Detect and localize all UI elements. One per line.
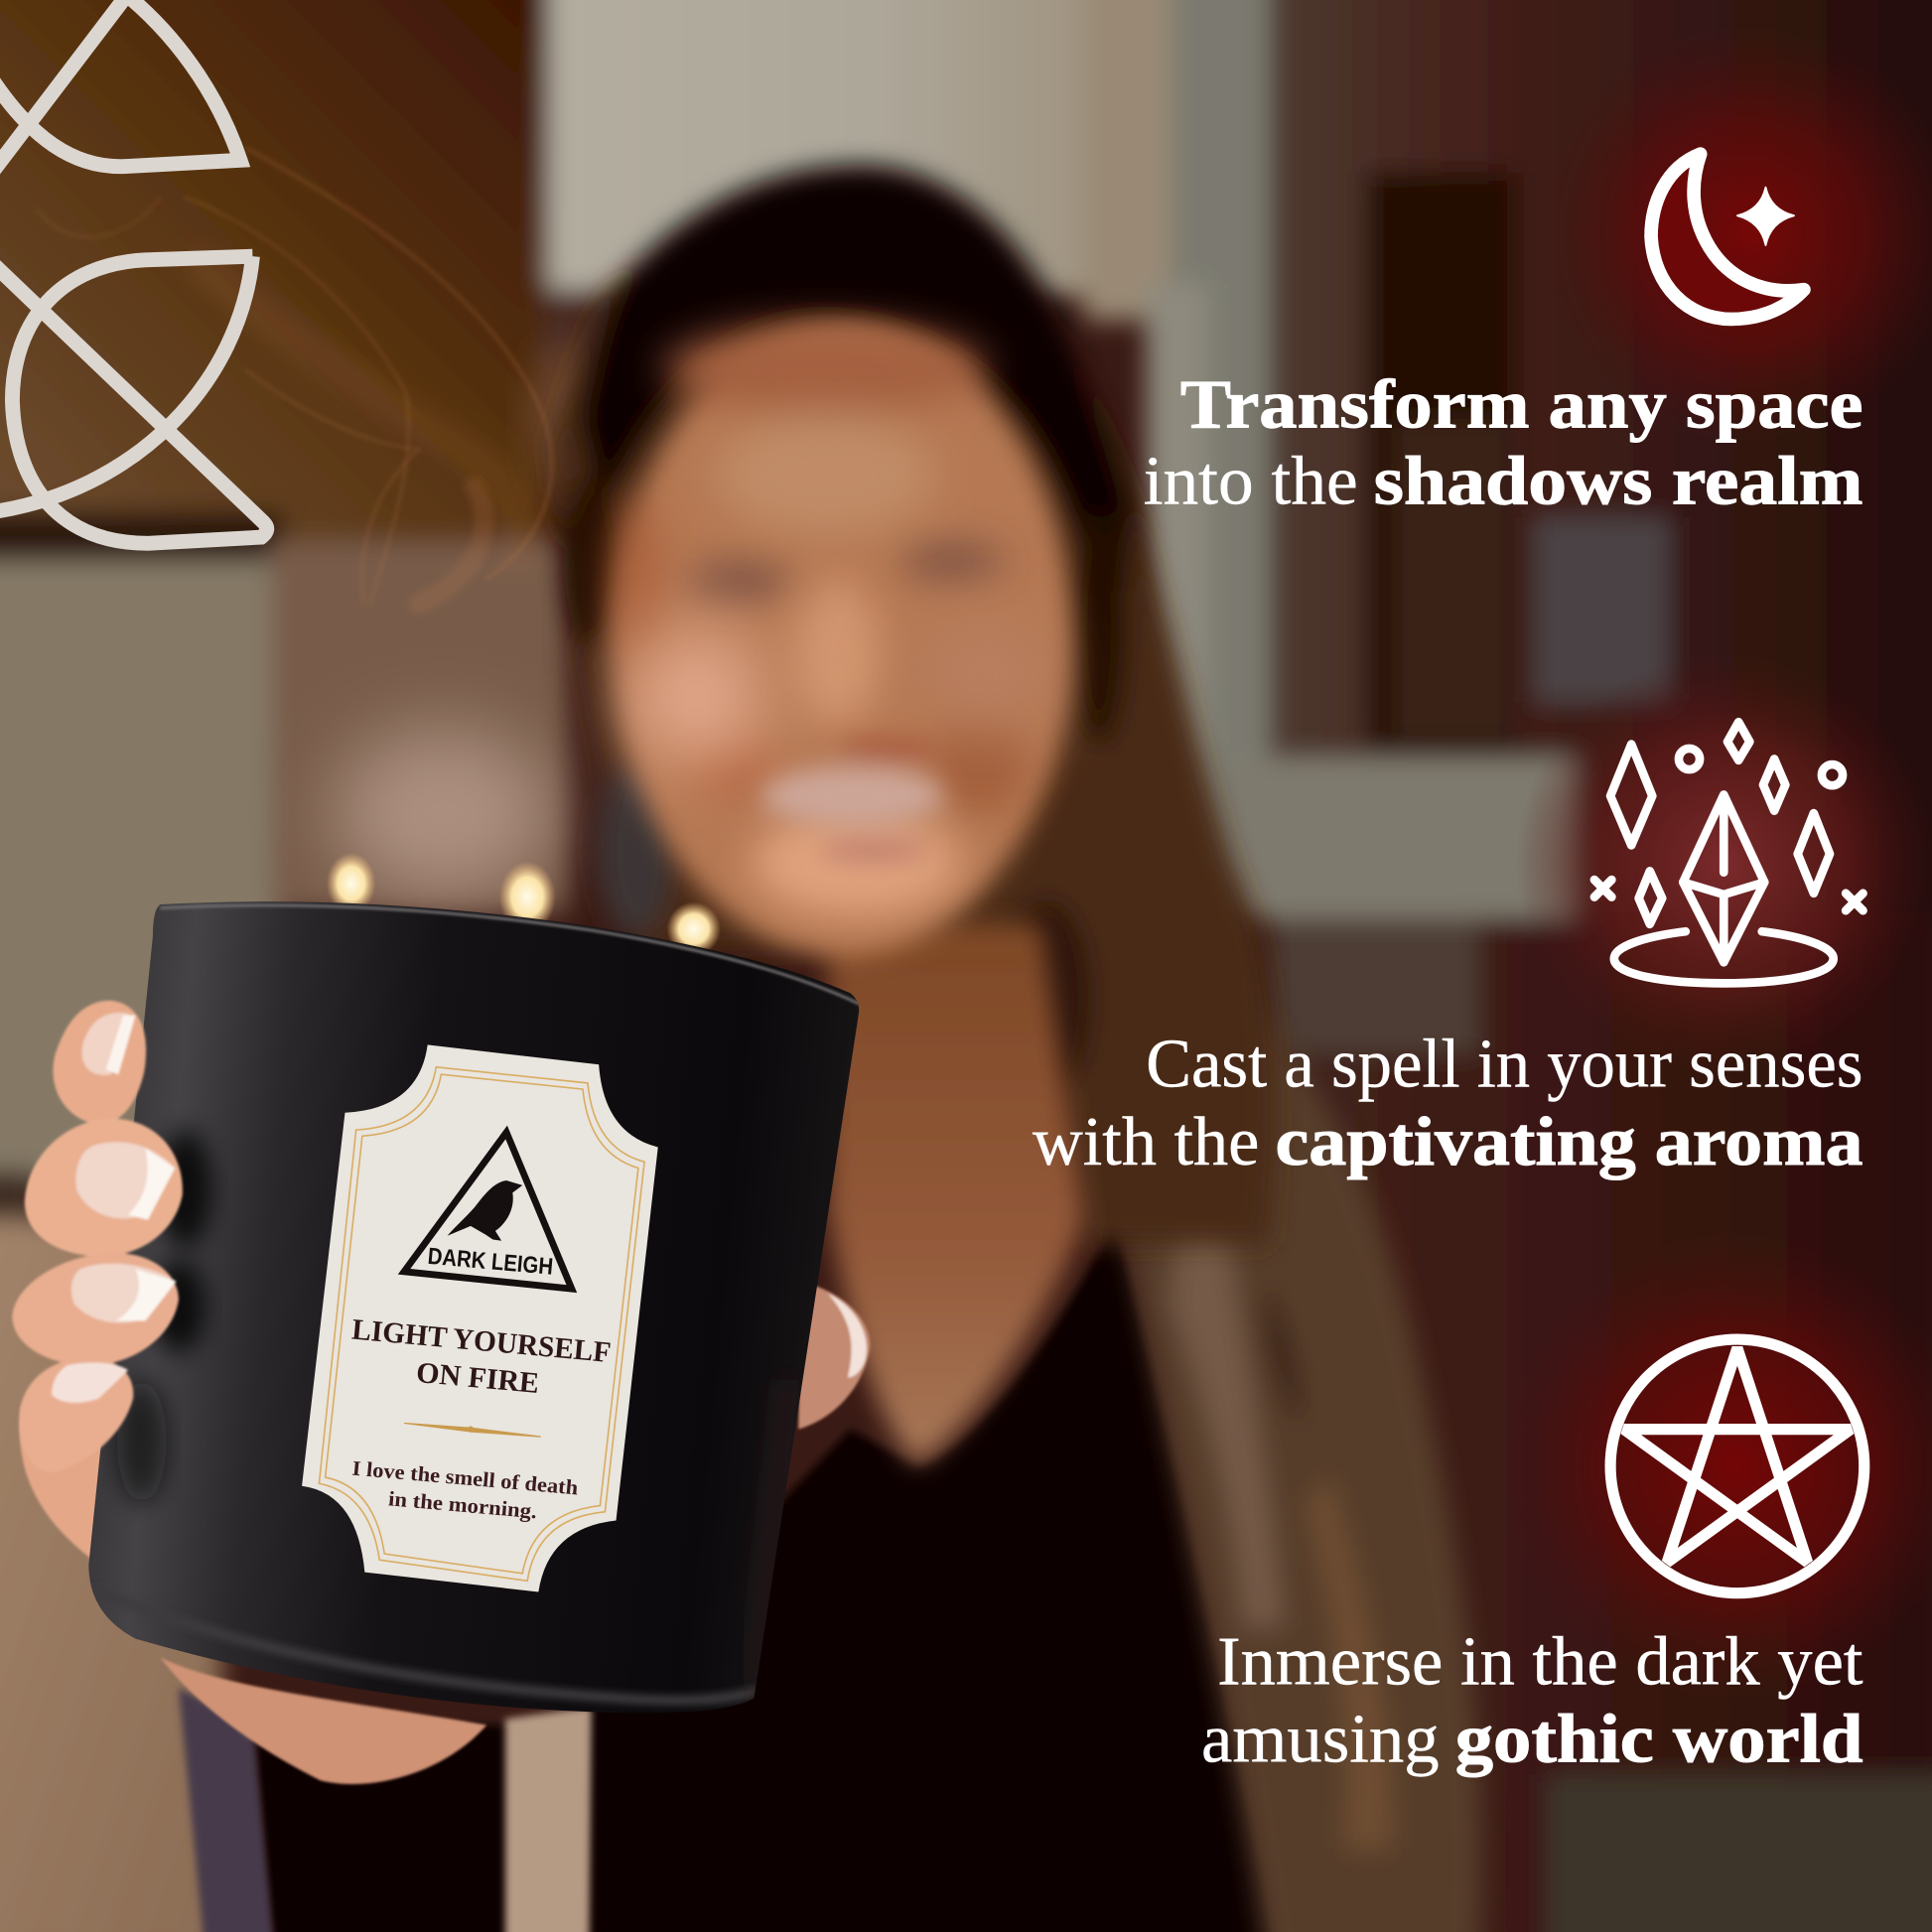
brand logo triangle [404,1133,572,1289]
arm, palm and far thumb holding candle [20,1282,870,1784]
finger shadows on jar [158,1130,211,1248]
finger 4 [19,1357,133,1472]
glow: red behind icons [1503,25,1932,1701]
heading 3 second line: gothic world [1455,1702,1863,1778]
heading 2 second line: captivating aroma [1276,1104,1863,1180]
sleeve and gap below arm [179,1688,592,1932]
label title: LIGHT YOURSELF [350,1312,613,1369]
finger 1 [53,1001,146,1124]
heading 2: Cast a spell in your senses [1146,1027,1863,1103]
label quote: I love the smell of death [351,1456,580,1499]
long hair [1128,961,1481,1932]
finger 2 [25,1119,183,1257]
heading 3: Inmerse in the dark yet [1217,1624,1863,1701]
label title: ON FIRE [415,1356,540,1400]
chest and neck [828,924,1084,1463]
face [608,326,1072,956]
icon: pentagram [1610,1339,1864,1593]
smoke rising from candle [37,148,552,604]
heading 1: Transform any space [1180,367,1863,444]
icon: magic crystal [1594,722,1863,983]
label quote: in the morning. [387,1486,538,1523]
far thumb [798,1282,870,1430]
brand logo triangle: DARK LEIGH [427,1243,554,1280]
black candle jar [88,901,860,1713]
heading 1 second line: into the [1144,444,1358,520]
heading 2 second line: with the [1033,1104,1259,1180]
heading 3 second line: amusing [1201,1702,1440,1778]
woman, out of focus [179,165,1481,1932]
heading 1 second line: shadows realm [1374,444,1863,520]
finger 3 [12,1253,179,1365]
raven [448,1180,522,1241]
hair around face [548,165,1276,1244]
product label [302,1044,658,1591]
label title [350,1312,613,1400]
label gold double border [319,1067,644,1581]
black top [252,1220,1282,1932]
label quote [351,1456,580,1523]
icon: crescent moon and star [1651,154,1804,319]
decorative logo mark top left [0,0,267,543]
label divider ornament [404,1423,541,1437]
flames [327,853,721,956]
hand: fingers gripping jar [12,1001,183,1472]
